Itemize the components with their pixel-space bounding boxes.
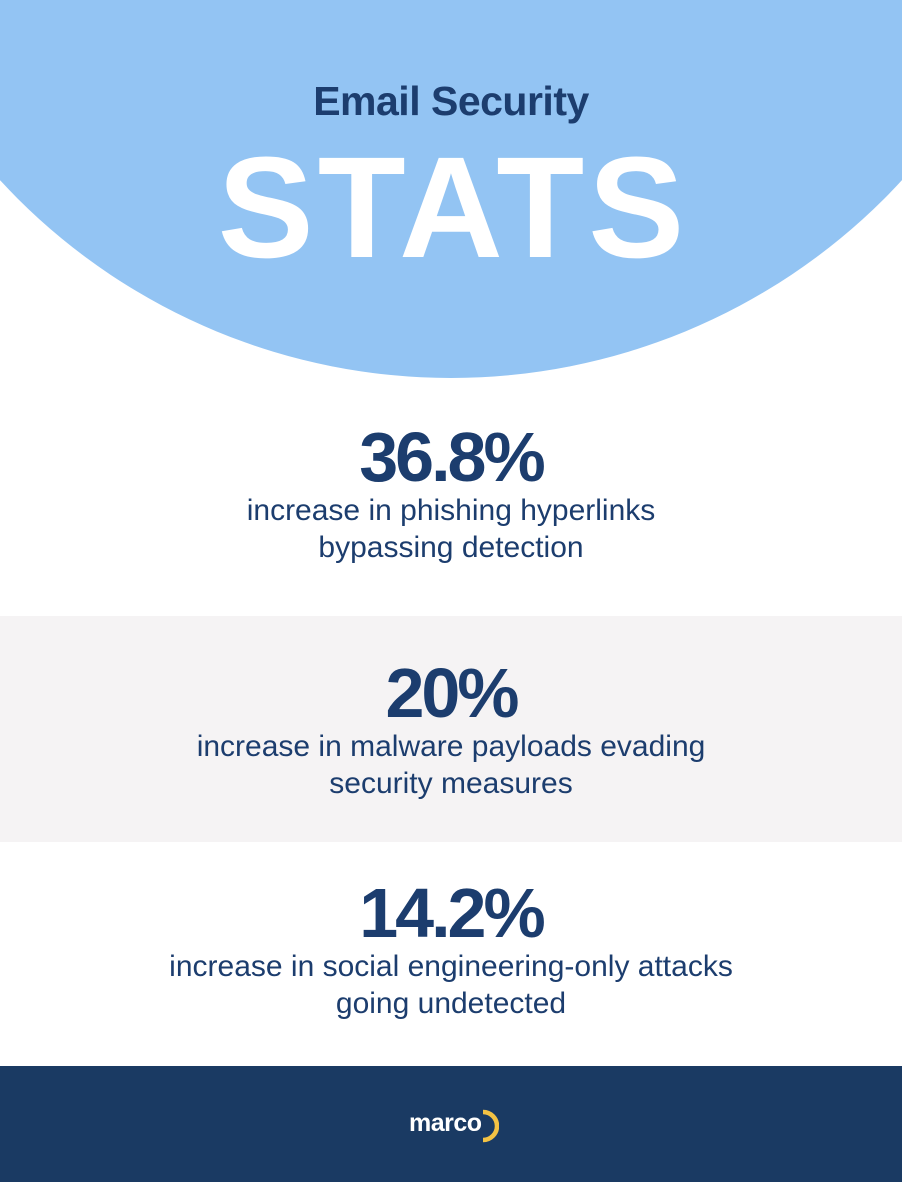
stat 1 number: 36.8% [359, 418, 543, 496]
panel: gray band stat 2 [0, 616, 902, 842]
stat 1 text: bypassing detection [318, 531, 584, 564]
stat 3 [169, 874, 733, 1020]
stat 3 text: going undetected [336, 987, 566, 1020]
stat 3 text [169, 950, 733, 1020]
stat 3 number: 14.2% [359, 874, 543, 952]
logo: marco: marco [409, 1109, 482, 1137]
stat 2 text: increase in malware payloads evading [197, 730, 705, 763]
header circle [0, 0, 902, 378]
title: STATS: STATS [218, 127, 688, 288]
stat 1 text [247, 494, 655, 564]
stat 2 text [197, 730, 705, 800]
stat 2 number: 20% [385, 654, 517, 732]
stat 1 text: increase in phishing hyperlinks [247, 494, 655, 527]
footer [0, 1066, 902, 1182]
logo: marco [409, 1109, 499, 1142]
title: Email Security: Email Security [313, 78, 589, 124]
stat 1 [247, 418, 655, 564]
stat 2 text: security measures [329, 767, 573, 800]
stat 3 text: increase in social engineering-only attacks [169, 950, 733, 983]
icon: yellow arc [483, 1110, 499, 1142]
